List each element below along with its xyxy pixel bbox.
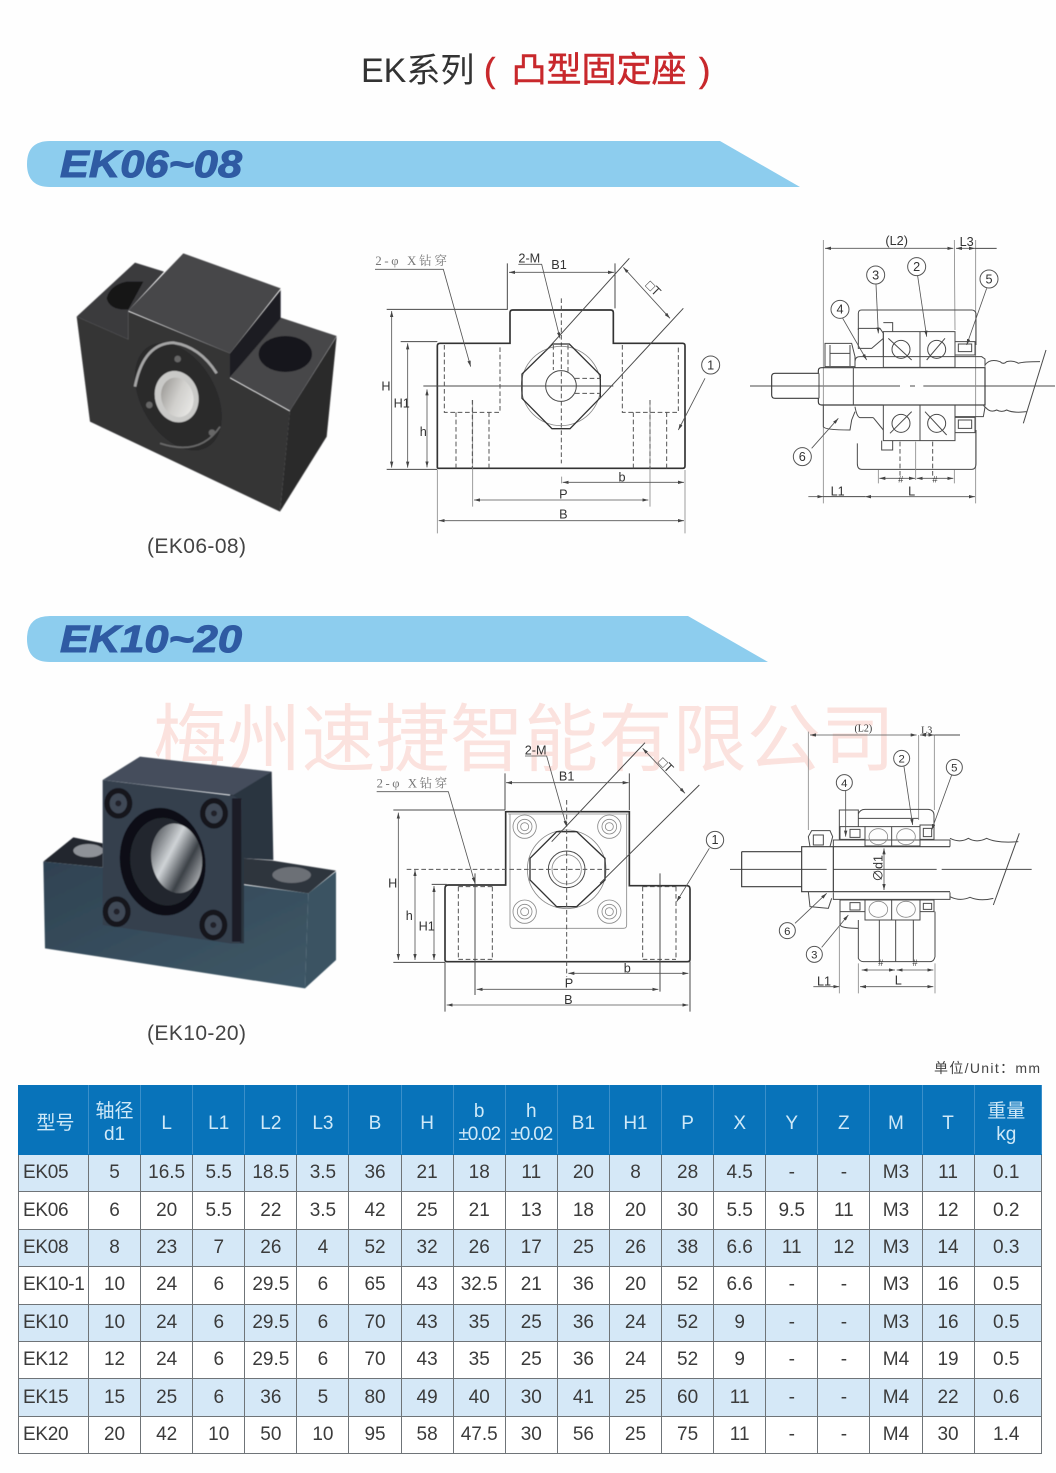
specification table: 0.5 — [993, 1312, 1019, 1333]
specification table: 36 — [260, 1387, 281, 1408]
specification table: 3.5 — [310, 1200, 336, 1221]
specification table: 43 — [417, 1349, 438, 1370]
specification table: 6.6 — [726, 1274, 753, 1295]
dimension labels: h — [420, 425, 427, 439]
specification table: 8 — [109, 1237, 120, 1258]
specification table: 24 — [156, 1274, 177, 1295]
specification table: 65 — [364, 1274, 386, 1295]
specification table: M3 — [883, 1312, 909, 1333]
specification table — [18, 1085, 1042, 1454]
dimension labels: P — [559, 487, 568, 501]
specification table: X — [733, 1112, 746, 1134]
specification table: 29.5 — [252, 1349, 289, 1370]
specification table: ±0.02 — [511, 1124, 552, 1145]
dimension labels: B1 — [551, 258, 567, 272]
dimension labels — [375, 252, 664, 522]
specification table: 32.5 — [461, 1274, 498, 1295]
specification table: 11 — [938, 1162, 958, 1183]
specification table: 20 — [625, 1200, 646, 1221]
specification table: M4 — [883, 1349, 909, 1370]
unit note: 单位/Unit：mm — [934, 1060, 1040, 1076]
specification table: 9 — [734, 1312, 745, 1333]
dimension labels: □T — [655, 755, 676, 776]
specification table: 11 — [730, 1387, 750, 1408]
specification table: Y — [785, 1112, 798, 1134]
caption: EK10-20: (EK10-20) — [147, 1022, 246, 1045]
label: 2-M leader — [518, 264, 560, 338]
specification table: 25 — [625, 1387, 646, 1408]
specification table: 5.5 — [206, 1162, 232, 1183]
dimension labels — [817, 723, 932, 988]
specification table: H1 — [623, 1112, 648, 1134]
specification table: ±0.02 — [458, 1124, 500, 1145]
specification table: 4 — [318, 1237, 328, 1258]
specification table: 5 — [318, 1387, 328, 1408]
specification table: 重量 — [987, 1101, 1025, 1122]
caption: EK06-08: (EK06-08) — [147, 535, 246, 558]
dimension labels: L — [908, 484, 915, 498]
specification table: - — [841, 1312, 847, 1333]
balloon 6 — [779, 893, 827, 939]
title: 凸型固定座 — [512, 51, 687, 90]
balloon 2 — [908, 258, 927, 337]
specification table: 9.5 — [779, 1200, 805, 1221]
specification table: 70 — [364, 1349, 386, 1370]
specification table: 80 — [364, 1387, 386, 1408]
dimension labels: □T — [643, 278, 664, 299]
balloon 1 — [677, 831, 724, 902]
dimension labels: H1 — [394, 396, 410, 410]
dimension labels: b — [624, 962, 631, 976]
dimension labels: b — [618, 471, 626, 485]
specification table: 36 — [573, 1349, 594, 1370]
specification table: M4 — [883, 1424, 909, 1445]
specification table: EK08 — [23, 1237, 68, 1258]
section banner: EK10~20 — [27, 616, 768, 662]
specification table: 58 — [417, 1424, 438, 1445]
balloon 4 — [831, 300, 867, 360]
dimension labels: L3 — [921, 725, 932, 736]
specification table: 36 — [364, 1162, 386, 1183]
specification table: L1 — [208, 1112, 229, 1134]
specification table: EK15 — [23, 1387, 68, 1408]
product photo: EK10-20 block — [43, 757, 336, 988]
specification table: L2 — [260, 1112, 281, 1134]
specification table: 0.5 — [993, 1274, 1019, 1295]
specification table: 6 — [318, 1349, 328, 1370]
specification table: 18.5 — [252, 1162, 289, 1183]
specification table: P — [681, 1112, 694, 1134]
specification table: 25 — [521, 1349, 542, 1370]
balloon 2: 2 — [913, 260, 920, 274]
specification table: 26 — [625, 1237, 646, 1258]
balloon 4: 4 — [836, 303, 844, 317]
watermark: 梅州速捷智能有限公司 — [153, 698, 895, 781]
balloon 5: 5 — [985, 272, 993, 286]
specification table: 25 — [417, 1200, 438, 1221]
dimension labels: L1 — [817, 974, 831, 988]
specification table: 8 — [630, 1162, 641, 1183]
specification table: EK10-1 — [23, 1274, 85, 1295]
balloon 4: 4 — [841, 778, 847, 790]
specification table: 18 — [469, 1162, 490, 1183]
specification table: EK05 — [23, 1162, 68, 1183]
specification table: 40 — [469, 1387, 490, 1408]
balloon 1 — [678, 356, 720, 430]
specification table: 轴径 — [96, 1101, 134, 1122]
specification table: EK10 — [23, 1312, 68, 1333]
specification table: 30 — [677, 1200, 698, 1221]
specification table: 6 — [213, 1274, 224, 1295]
specification table: 9 — [734, 1349, 745, 1370]
specification table: 20 — [625, 1274, 646, 1295]
specification table: 43 — [417, 1274, 438, 1295]
dimension labels: # — [932, 475, 938, 485]
specification table: 20 — [104, 1424, 125, 1445]
specification table: 10 — [104, 1274, 125, 1295]
specification table: 4.5 — [726, 1162, 753, 1183]
specification table: 6 — [318, 1312, 328, 1333]
specification table: 35 — [469, 1312, 490, 1333]
specification table: B — [369, 1112, 381, 1134]
specification table: 5 — [109, 1162, 120, 1183]
specification table: 15 — [104, 1387, 125, 1408]
specification table: 7 — [213, 1237, 224, 1258]
specification table: - — [789, 1312, 795, 1333]
specification table: 29.5 — [252, 1274, 289, 1295]
balloon 6: 6 — [784, 926, 790, 938]
dimension labels — [377, 744, 676, 1007]
specification table: T — [942, 1112, 954, 1134]
specification table: - — [789, 1349, 795, 1370]
specification table: 25 — [521, 1312, 542, 1333]
specification table: 10 — [104, 1312, 125, 1333]
dimension labels: 2-M — [525, 744, 547, 758]
specification table: 型号 — [36, 1112, 74, 1134]
specification table: B1 — [572, 1112, 595, 1134]
specification table: M — [888, 1112, 904, 1134]
dimension labels: H — [388, 876, 397, 890]
balloon 3: 3 — [811, 950, 817, 962]
specification table: 17 — [521, 1237, 542, 1258]
dimension labels: L3 — [960, 235, 974, 249]
dimension labels: # — [898, 475, 904, 485]
specification table: 30 — [937, 1424, 959, 1445]
specification table: EK06 — [23, 1200, 68, 1221]
specification table: M3 — [883, 1200, 909, 1221]
dimension labels: B — [559, 508, 568, 522]
specification table: 60 — [677, 1387, 698, 1408]
dimension labels: H1 — [419, 920, 435, 934]
balloon 4 — [836, 775, 852, 837]
specification table: 56 — [573, 1424, 594, 1445]
section banner: EK06~08 — [27, 141, 800, 187]
specification table: 6.6 — [726, 1237, 753, 1258]
specification table: 25 — [156, 1387, 177, 1408]
specification table: - — [841, 1274, 847, 1295]
specification table: 6 — [318, 1274, 328, 1295]
section banner: EK06~08: EK06~08 — [60, 144, 243, 186]
specification table: 35 — [469, 1349, 490, 1370]
specification table: 52 — [677, 1274, 698, 1295]
technical drawing: EK10-20 front view — [377, 743, 724, 1012]
dimension labels: # — [912, 958, 918, 968]
specification table: 19 — [937, 1349, 959, 1370]
specification table: 52 — [677, 1349, 698, 1370]
specification table: 42 — [364, 1200, 386, 1221]
balloon 2: 2 — [899, 754, 905, 766]
specification table: 1.4 — [993, 1424, 1019, 1445]
specification table: 21 — [469, 1200, 490, 1221]
dimension labels: # — [878, 958, 884, 968]
specification table: 10 — [208, 1424, 229, 1445]
technical drawing: EK06-08 section view — [750, 234, 1055, 503]
balloon 5 — [967, 270, 998, 345]
specification table: 49 — [417, 1387, 438, 1408]
specification table: 75 — [677, 1424, 698, 1445]
specification table: L — [161, 1112, 172, 1134]
balloon 1: 1 — [711, 833, 719, 847]
label: 2-phi X leader — [375, 269, 471, 367]
specification table: 30 — [521, 1424, 542, 1445]
specification table: 52 — [677, 1312, 698, 1333]
specification table: 28 — [677, 1162, 698, 1183]
dimension labels: h — [406, 909, 413, 923]
specification table: - — [841, 1162, 847, 1183]
specification table: 16 — [937, 1312, 959, 1333]
specification table: 41 — [573, 1387, 594, 1408]
specification table: 47.5 — [461, 1424, 498, 1445]
specification table: 0.1 — [993, 1162, 1019, 1183]
dimension labels: 2-φ X钻穿 — [375, 253, 447, 268]
specification table: 0.3 — [993, 1237, 1019, 1258]
technical drawing: EK10-20 section view — [730, 723, 1032, 993]
specification table: 30 — [521, 1387, 542, 1408]
specification table: 42 — [156, 1424, 177, 1445]
specification table: 5.5 — [726, 1200, 753, 1221]
title: EK系列 — [361, 52, 474, 90]
dimension labels: B — [564, 993, 573, 1007]
specification table: 11 — [834, 1200, 854, 1221]
specification table: 6 — [213, 1312, 224, 1333]
specification table: 22 — [937, 1387, 959, 1408]
specification table: 21 — [521, 1274, 542, 1295]
specification table: 26 — [469, 1237, 490, 1258]
specification table: 18 — [573, 1200, 594, 1221]
specification table: h — [526, 1101, 537, 1122]
title — [361, 51, 710, 90]
balloon 2 — [894, 750, 913, 825]
balloon 6: 6 — [799, 450, 806, 464]
specification table: 29.5 — [252, 1312, 289, 1333]
specification table: - — [841, 1349, 847, 1370]
specification table: 21 — [417, 1162, 438, 1183]
specification table: - — [841, 1387, 847, 1408]
specification table: 14 — [937, 1237, 959, 1258]
specification table: 12 — [937, 1200, 959, 1221]
specification table: 23 — [156, 1237, 177, 1258]
specification table: L3 — [312, 1112, 333, 1134]
specification table: 20 — [156, 1200, 177, 1221]
specification table: 25 — [625, 1424, 646, 1445]
specification table: - — [789, 1274, 795, 1295]
label: 2-M leader — [525, 756, 567, 827]
dimension labels: ∅d1 — [872, 855, 886, 882]
specification table: 16 — [937, 1274, 959, 1295]
specification table: 24 — [625, 1312, 646, 1333]
specification table: 24 — [156, 1312, 177, 1333]
balloon 5 — [932, 759, 962, 830]
specification table: 10 — [312, 1424, 333, 1445]
specification table: H — [420, 1112, 434, 1134]
specification table: 95 — [364, 1424, 386, 1445]
label: 2-phi X leader — [377, 792, 475, 883]
balloon 3: 3 — [872, 268, 879, 282]
dimension labels: L — [895, 974, 902, 988]
specification table: 6 — [109, 1200, 120, 1221]
specification table: M3 — [883, 1274, 909, 1295]
dimension labels: (L2) — [885, 234, 908, 248]
specification table: 52 — [364, 1237, 386, 1258]
specification table: EK12 — [23, 1349, 68, 1370]
balloon 6 — [793, 418, 838, 466]
specification table: M3 — [883, 1237, 909, 1258]
specification table: Z — [838, 1112, 850, 1134]
specification table: b — [474, 1101, 484, 1122]
dimension labels: (L2) — [854, 723, 872, 734]
specification table: 0.2 — [993, 1200, 1019, 1221]
specification table: 32 — [417, 1237, 438, 1258]
specification table: 20 — [573, 1162, 594, 1183]
specification table: 25 — [573, 1237, 594, 1258]
specification table: 6 — [213, 1387, 224, 1408]
specification table: 0.6 — [993, 1387, 1019, 1408]
specification table: 5.5 — [206, 1200, 232, 1221]
specification table: 22 — [260, 1200, 281, 1221]
specification table: 13 — [521, 1200, 542, 1221]
balloon 5: 5 — [951, 763, 957, 775]
specification table: - — [789, 1387, 795, 1408]
specification table: 11 — [730, 1424, 750, 1445]
specification table: 38 — [677, 1237, 698, 1258]
specification table: 3.5 — [310, 1162, 336, 1183]
specification table: 11 — [782, 1237, 802, 1258]
specification table: M4 — [883, 1387, 909, 1408]
product photo: EK06-08 block — [77, 253, 337, 512]
specification table: 11 — [521, 1162, 541, 1183]
specification table: 16.5 — [148, 1162, 185, 1183]
title: ) — [699, 52, 710, 90]
balloon 3 — [806, 915, 848, 962]
dimension labels: L1 — [831, 484, 845, 498]
specification table: 50 — [260, 1424, 281, 1445]
title: ( — [484, 52, 496, 90]
specification table: kg — [996, 1124, 1016, 1145]
dimension labels: H — [381, 380, 391, 394]
specification table: 24 — [625, 1349, 646, 1370]
specification table: 36 — [573, 1312, 594, 1333]
dimension labels — [831, 234, 974, 498]
dimension labels: B1 — [559, 770, 574, 784]
specification table: 24 — [156, 1349, 177, 1370]
section banner: EK10~20: EK10~20 — [60, 619, 242, 661]
dimension labels: 2-M — [518, 252, 540, 266]
specification table: 6 — [213, 1349, 224, 1370]
specification table: 12 — [833, 1237, 854, 1258]
balloon 1: 1 — [707, 358, 714, 372]
specification table: - — [789, 1162, 795, 1183]
specification table: 0.5 — [993, 1349, 1019, 1370]
dimension labels: P — [565, 976, 573, 990]
specification table: 36 — [573, 1274, 594, 1295]
specification table: - — [841, 1424, 847, 1445]
technical drawing: EK06-08 front view — [375, 252, 720, 533]
specification table: EK20 — [23, 1424, 68, 1445]
specification table: 70 — [364, 1312, 386, 1333]
specification table: - — [789, 1424, 795, 1445]
balloon 3 — [867, 266, 885, 333]
specification table: 26 — [260, 1237, 281, 1258]
specification table: 12 — [104, 1349, 125, 1370]
specification table: d1 — [104, 1124, 125, 1145]
dimension labels: 2-φ X钻穿 — [377, 775, 448, 790]
specification table: M3 — [883, 1162, 909, 1183]
specification table: 43 — [417, 1312, 438, 1333]
